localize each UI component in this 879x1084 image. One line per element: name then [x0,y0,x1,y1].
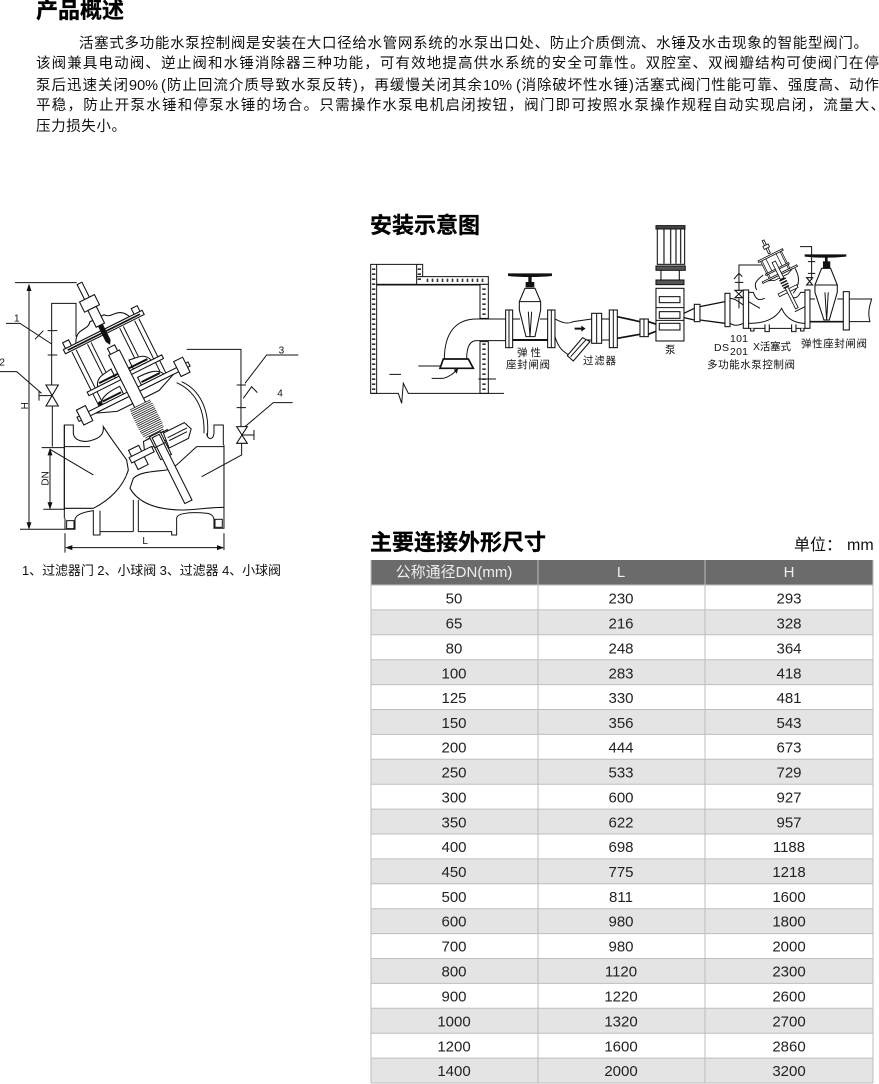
row DN900: 1220 [604,988,638,1006]
text block: product description: (消除破坏性水锤)活塞式阀门性能可靠、强度高、动作 [516,76,879,94]
row DN50 [446,590,802,608]
row DN800: 2300 [772,964,806,980]
row DN600 [371,909,873,934]
row DN65: 65 [446,616,462,632]
table header: H [784,564,794,581]
row DN1400: 2000 [604,1063,638,1080]
row DN300 [441,790,802,806]
row DN250: 250 [441,764,467,782]
row DN900 [441,988,806,1006]
row DN500: 811 [609,889,633,906]
valve body [50,382,242,535]
row DN50: 230 [608,590,634,608]
row DN350: 622 [608,814,634,832]
strainer [555,310,617,361]
installation schematic labels: 201 [730,346,748,358]
row DN1400: 1400 [437,1063,471,1080]
row DN800: 1120 [605,964,637,980]
water tank [371,264,504,403]
unit label: 单位： [794,536,842,554]
dimension lines H, DN, L [15,283,224,553]
row DN200: 444 [608,740,634,756]
row DN200: 673 [776,740,802,756]
row DN700: 980 [608,938,634,956]
reducer from pump [684,293,743,327]
table header: L [617,564,625,581]
row DN600: 600 [441,914,467,930]
row DN450: 1218 [772,864,806,881]
bypass pipe with strainer 1 and ball valve 2: 1 [14,314,20,325]
row DN350 [371,809,873,834]
piston multi-function pump control valve [734,232,815,332]
row DN700: 2000 [772,938,806,956]
installation schematic labels: 过滤器 [583,354,616,367]
text block: product description: 该阀兼具电动阀、逆止阀和水锤消除器三种功能，可有效地提高供水系统的安全可靠性。双腔室、双阀瓣结构可使阀门在停 [36,54,879,72]
text block: product description: 泵后迅速关闭 [36,77,128,94]
row DN300: 300 [441,790,467,806]
row DN250 [371,759,873,784]
installation schematic labels: 弹性座封闸阀 [801,337,867,350]
valve head [746,232,814,317]
installation schematic labels: 泵 [665,344,676,356]
dimension lines H, DN, L: H [20,402,31,409]
row DN1000: 2700 [772,1014,806,1030]
row DN350: 350 [441,814,467,832]
bypass pipe with strainer 1 and ball valve 2 [0,303,76,447]
row DN250: 729 [776,764,802,782]
dimension lines H, DN, L: DN [41,471,52,486]
row DN150: 543 [776,715,802,732]
row DN250: 533 [608,764,634,782]
row DN900: 900 [441,988,467,1006]
row DN1000 [371,1008,873,1033]
row DN80 [446,640,802,658]
pump and motor [656,226,685,341]
row DN500: 1600 [772,889,806,906]
unit label: mm [847,537,874,554]
row DN65 [371,610,873,635]
bypass pipe with strainer 3 and ball valve 4 [187,345,298,443]
text block: product description: 压力损失小。 [36,118,126,135]
row DN65: 328 [776,616,802,632]
row DN80: 248 [608,640,634,658]
text block: product description: 平稳，防止开泵水锤和停泵水锤的场合。只需操作水泵电机启闭按钮，阀门即可按照水泵操作规程自动实现启闭，流量大、 [36,97,879,114]
row DN100: 100 [441,666,467,682]
table header: 公称通径DN(mm) [396,564,512,581]
text block: product description: 活塞式多功能水泵控制阀是安装在大口径给水管网系统的水泵出口处、防止介质倒流、水锤及水击现象的智能型阀门。 [79,34,868,52]
unit label [794,536,874,554]
dimension lines H, DN, L: L [142,536,148,547]
row DN200: 200 [441,740,467,756]
caption: valve parts: 1、过滤器门 2、小球阀 3、过滤器 4、小球阀 [22,563,281,578]
row DN125: 125 [441,690,467,707]
installation schematic labels: 弹性 [517,346,541,359]
row DN100 [371,660,873,685]
bypass pipe with strainer 3 and ball valve 4: 4 [277,389,283,400]
row DN700: 700 [441,938,467,956]
row DN80: 364 [776,640,802,658]
installation schematic labels: DS [714,342,729,354]
row DN500: 500 [441,889,467,906]
gate valve [506,274,555,348]
row DN65: 216 [608,616,634,632]
second gate valve [805,255,849,330]
row DN1400: 3200 [772,1063,806,1080]
text block: product description: 10% [483,78,512,94]
row DN150 [371,710,873,734]
row DN300: 600 [608,790,634,806]
row DN450 [371,859,873,884]
outlet pipe [849,299,872,322]
row DN450: 450 [441,864,467,881]
row DN1000: 1000 [437,1014,471,1030]
row DN150: 356 [608,715,634,732]
row DN800: 800 [441,964,467,980]
heading: main connection dimensions: 主要连接外形尺寸 [370,530,546,555]
row DN1400 [371,1058,873,1083]
row DN100: 283 [608,666,634,682]
row DN500 [441,889,806,906]
row DN1200 [437,1038,806,1056]
row DN450: 775 [608,864,634,881]
row DN125 [441,690,802,707]
row DN200 [441,740,802,756]
row DN400: 1188 [773,839,805,856]
installation schematic labels: 101 [730,333,748,345]
installation schematic [371,226,872,403]
disc and seat [125,419,220,517]
heading: installation diagram: 安装示意图 [370,213,480,238]
row DN1200: 1600 [604,1038,638,1056]
row DN900: 2600 [772,988,806,1006]
row DN600: 980 [608,914,634,930]
row DN800 [371,958,873,983]
dimensions table [371,560,873,1083]
row DN400 [441,839,805,856]
text block: product description: (防止回流介质导致水泵反转)，再缓慢关闭其余 [161,76,482,94]
row DN300: 927 [776,790,802,806]
row DN50: 50 [446,590,462,608]
row DN700 [441,938,806,956]
valve section drawing [0,256,298,553]
row DN50: 293 [776,590,802,608]
bypass pipe with strainer 3 and ball valve 4: 3 [279,345,285,356]
row DN1200: 1200 [437,1038,471,1056]
installation schematic labels [506,333,867,371]
row DN125: 481 [776,690,802,707]
row DN400: 698 [608,839,634,856]
row DN1000: 1320 [604,1014,638,1030]
table header [371,560,873,585]
text block: product description: 90% [129,78,158,94]
spring [130,400,166,440]
text block: product description [36,34,879,135]
row DN125: 330 [608,690,634,707]
row DN350: 957 [776,814,802,832]
valve bonnet, cylinder, spring and stem [24,256,244,529]
installation schematic labels: 多功能水泵控制阀 [707,358,795,371]
row DN150: 150 [441,715,467,732]
suction pipe [440,319,506,368]
row DN1200: 2860 [772,1038,806,1056]
reducer to pump [617,317,657,338]
row DN100: 418 [776,666,802,682]
installation schematic labels: X活塞式 [753,340,792,353]
row DN400: 400 [441,839,467,856]
row DN80: 80 [446,640,462,658]
installation schematic labels: 座封闸阀 [506,358,550,371]
row DN600: 1800 [772,914,806,930]
